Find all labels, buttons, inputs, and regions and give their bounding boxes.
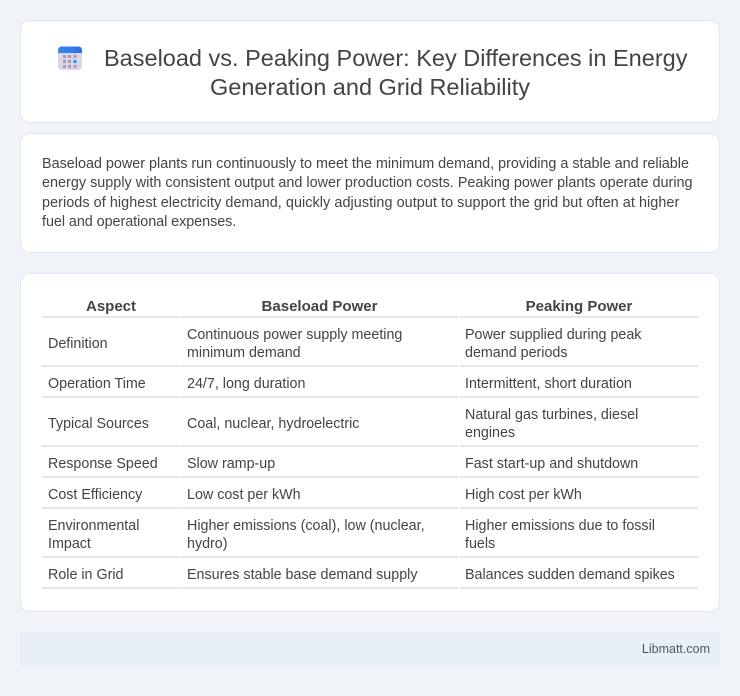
comparison table: 24/7, long duration [187, 376, 305, 392]
comparison table: Peaking Power [526, 298, 632, 315]
icon: calendar [58, 46, 82, 70]
intro text: fuel and operational expenses. [42, 214, 236, 230]
title: Baseload vs. Peaking Power: Key Differences in Energy [104, 45, 687, 71]
intro text: Baseload power plants run continuously to meet the minimum demand, providing a stable and reliable [42, 156, 689, 172]
footer bar [20, 632, 720, 666]
comparison table: Cost Efficiency [48, 487, 142, 503]
comparison table: Intermittent, short duration [465, 376, 632, 392]
comparison table: Aspect [86, 298, 136, 315]
comparison table: Baseload Power [262, 298, 377, 315]
comparison table: Ensures stable base demand supply [187, 567, 417, 583]
comparison table: Natural gas turbines, diesel [465, 407, 638, 423]
intro text: periods of highest electricity demand, quickly adjusting output to support the grid but often at higher [42, 195, 679, 211]
intro text [42, 156, 693, 230]
comparison table: Power supplied during peak [465, 327, 641, 343]
comparison table: fuels [465, 536, 495, 552]
comparison table: Typical Sources [48, 416, 149, 432]
comparison table: Definition [48, 336, 108, 352]
panel: header [20, 20, 720, 123]
comparison table: Impact [48, 536, 91, 552]
comparison table: minimum demand [187, 345, 301, 361]
comparison table: Higher emissions (coal), low (nuclear, [187, 518, 425, 534]
comparison table: Higher emissions due to fossil [465, 518, 655, 534]
comparison table: hydro) [187, 536, 228, 552]
comparison table: engines [465, 425, 515, 441]
comparison table: Environmental [48, 518, 139, 534]
title: Generation and Grid Reliability [210, 74, 530, 100]
comparison table: Coal, nuclear, hydroelectric [187, 416, 359, 432]
comparison table: Operation Time [48, 376, 146, 392]
comparison table: Low cost per kWh [187, 487, 301, 503]
intro text: energy supply with consistent output and lower production costs. Peaking power plants operate during [42, 175, 693, 191]
footer credit: Libmatt.com [642, 642, 710, 656]
panel: comparison table [20, 273, 720, 612]
comparison table: demand periods [465, 345, 568, 361]
comparison table: High cost per kWh [465, 487, 582, 503]
comparison table [42, 298, 698, 589]
comparison table: Slow ramp-up [187, 456, 275, 472]
comparison table: Role in Grid [48, 567, 124, 583]
comparison table: Continuous power supply meeting [187, 327, 402, 343]
comparison table: Response Speed [48, 456, 158, 472]
title [104, 45, 688, 100]
comparison table: Balances sudden demand spikes [465, 567, 675, 583]
comparison table: Fast start-up and shutdown [465, 456, 638, 472]
panel: intro [20, 133, 720, 253]
